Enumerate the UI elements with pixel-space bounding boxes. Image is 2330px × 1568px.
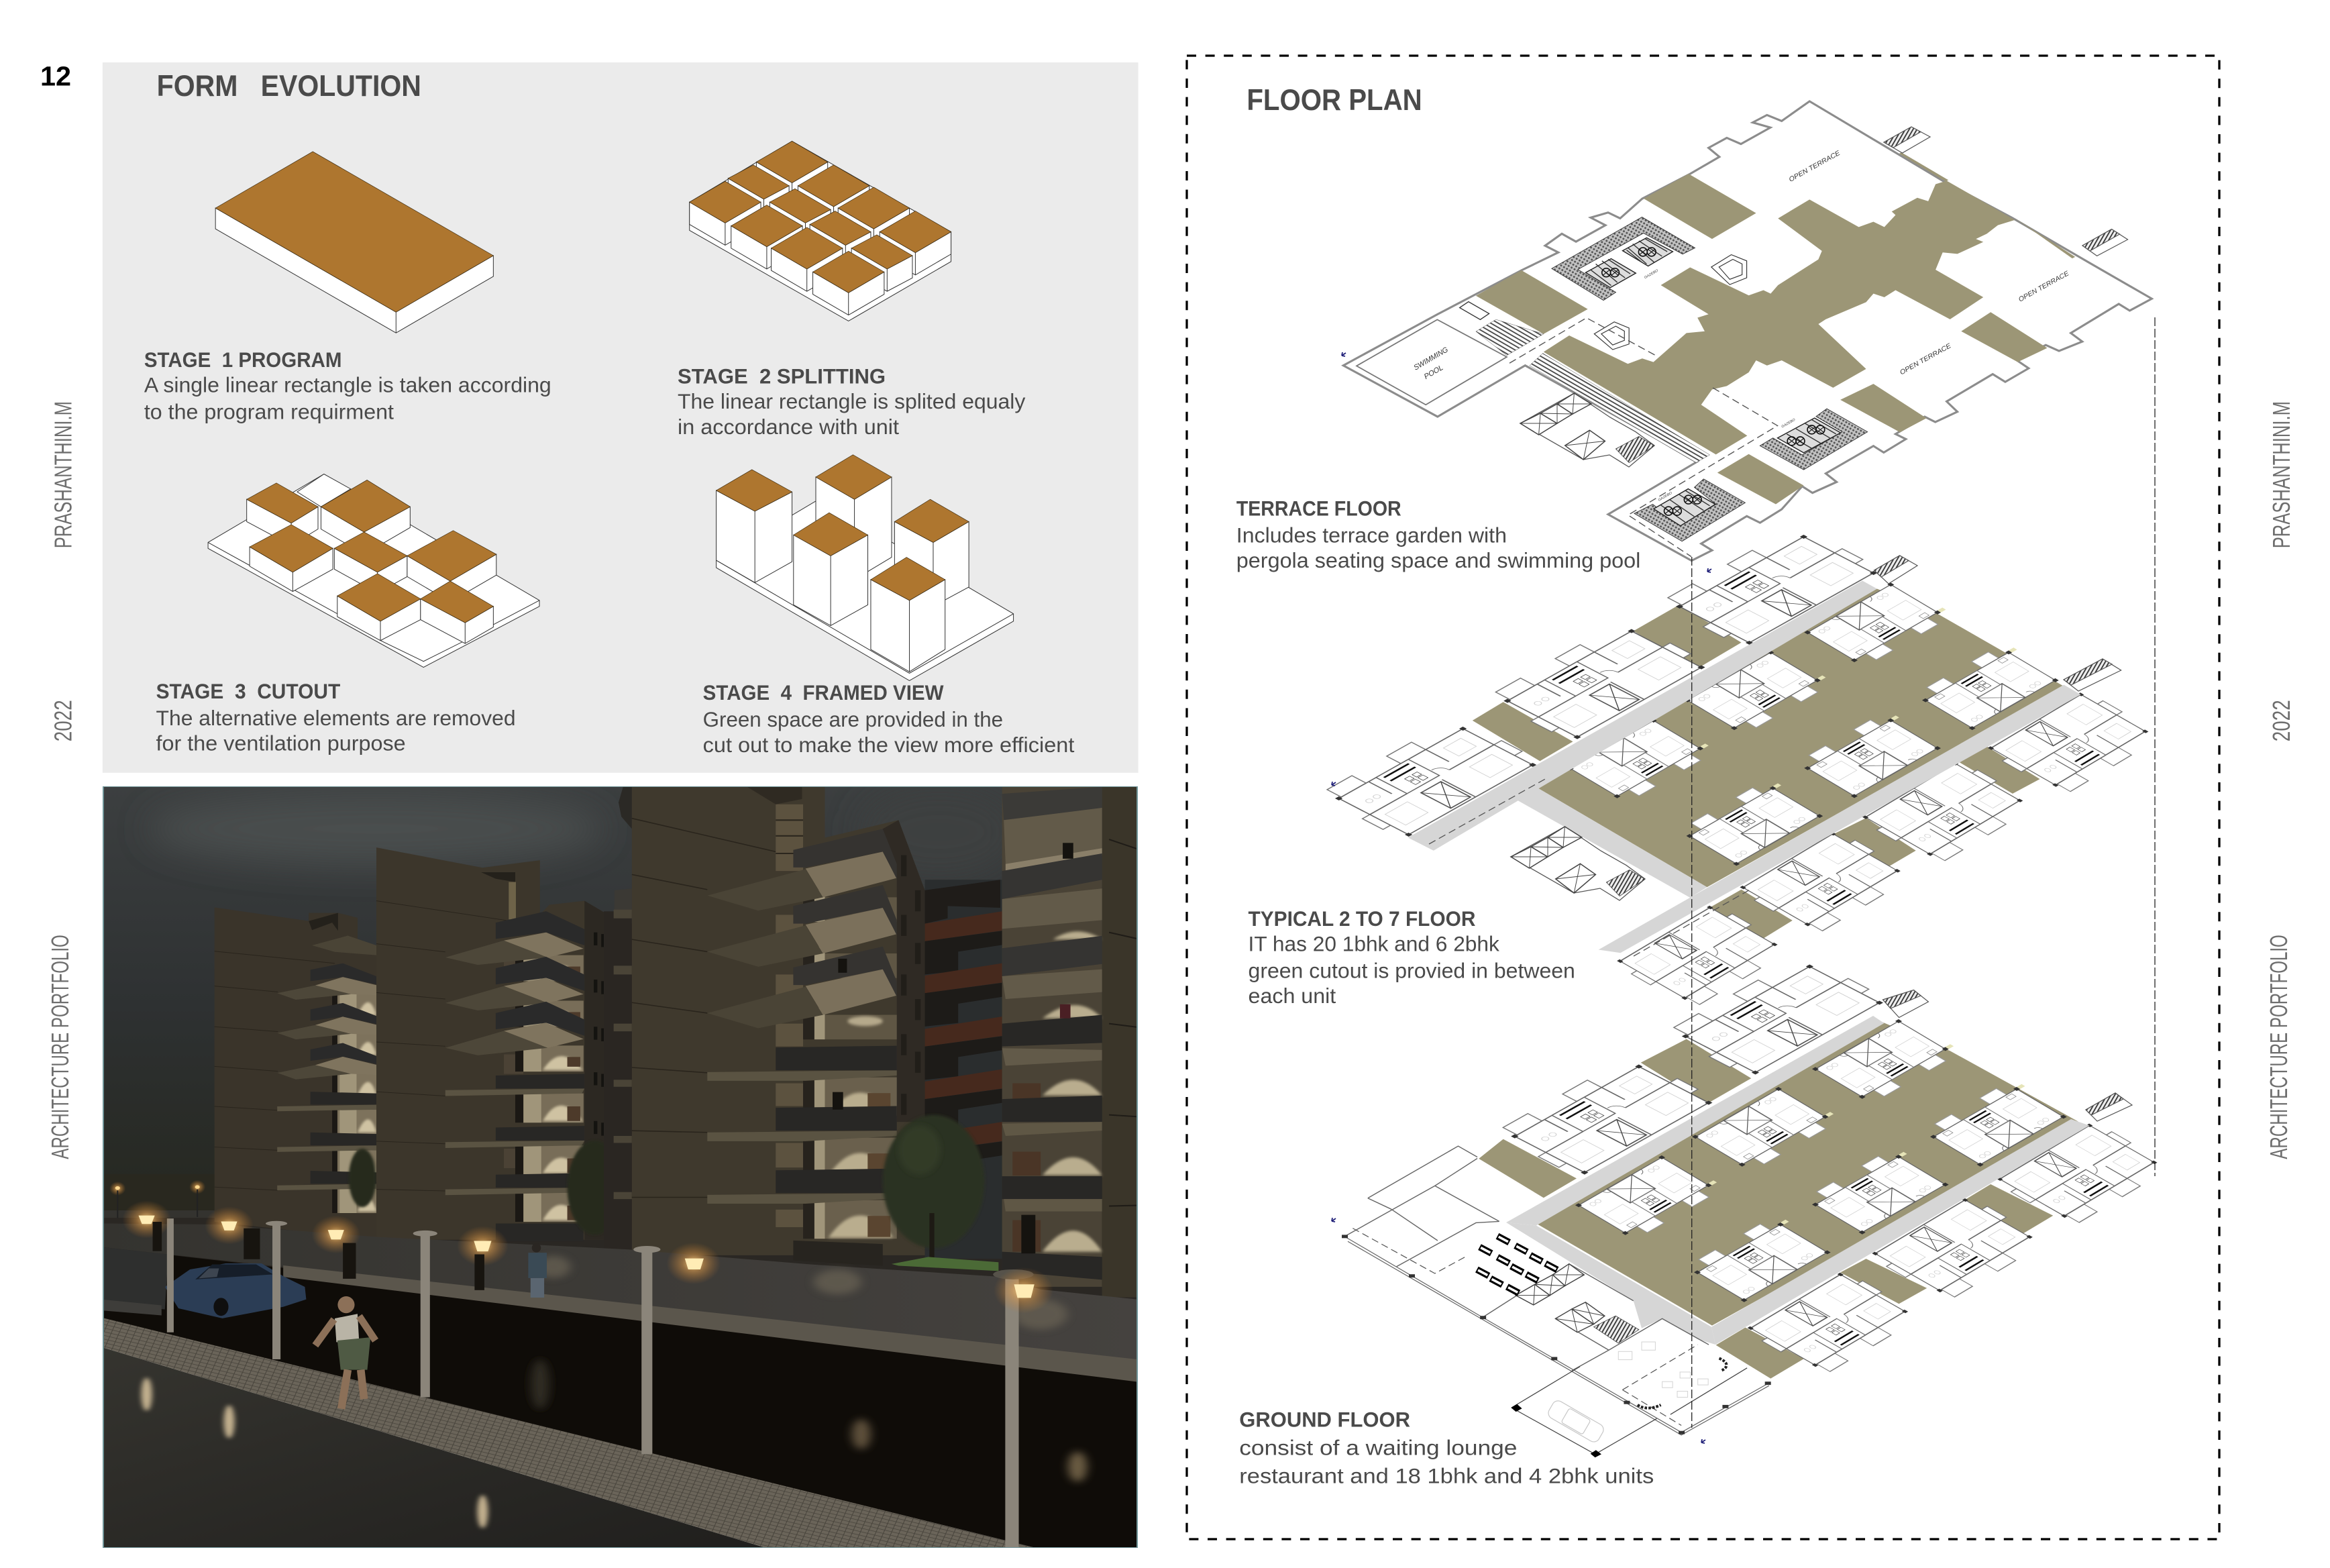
lower paver strip bbox=[101, 1317, 1041, 1549]
text: terrace floor: TERRACE FLOOR bbox=[1236, 496, 1401, 521]
plan: ground floor bbox=[1332, 955, 2172, 1457]
third terrace label: OPEN TERRACE bbox=[2017, 270, 2070, 304]
green strip bbox=[1899, 152, 1948, 181]
panel: form evolution bbox=[103, 62, 1138, 773]
side text right: ARCHITECTURE PORTFOLIO bbox=[2265, 935, 2292, 1159]
photo: night render of apartment blocks bbox=[101, 785, 1138, 1549]
terrace green roof cross bbox=[1544, 180, 2015, 454]
text: stage 4: STAGE 4 FRAMED VIEW bbox=[703, 680, 944, 704]
lamp posts bbox=[167, 1218, 1034, 1549]
tree behind building 2 bbox=[349, 1149, 376, 1207]
bottom asphalt bbox=[101, 1347, 770, 1549]
terrace open labels: GAZEBO bbox=[1644, 268, 1659, 280]
terrace service cores bbox=[1520, 393, 1654, 467]
terrace outline bbox=[1343, 101, 2152, 561]
ground plane bbox=[101, 1180, 1137, 1549]
man in vest bbox=[315, 1296, 376, 1409]
terrace open labels: OPEN TERRACE bbox=[1899, 342, 1952, 376]
balcony figures bbox=[833, 843, 1073, 1253]
car bbox=[165, 1263, 306, 1318]
page number: 12 bbox=[40, 60, 71, 91]
terrace open labels: GAZEBO bbox=[1658, 491, 1673, 503]
gazebo icons bbox=[1594, 255, 1747, 350]
text: stage 2: STAGE 2 SPLITTING bbox=[678, 364, 886, 388]
typical corridors bbox=[1408, 580, 2081, 953]
large tree bbox=[883, 1115, 998, 1271]
text: ground floor: GROUND FLOOR bbox=[1239, 1407, 1410, 1431]
text: stage 2 bbox=[678, 364, 1025, 439]
buildings 1 and 2 bbox=[215, 847, 634, 1241]
side text left bbox=[46, 401, 76, 1159]
pavement bbox=[101, 1223, 1137, 1367]
text: terrace floor: Includes terrace garden with bbox=[1236, 523, 1507, 547]
panel: floor plan dashed frame bbox=[1187, 56, 2219, 1539]
diagram: stage 4 framed view bbox=[717, 455, 1014, 680]
text: stage 3 bbox=[156, 679, 516, 755]
text: typical floor: each unit bbox=[1249, 984, 1336, 1008]
tree beside building 3 bbox=[566, 1142, 599, 1232]
walkers bbox=[153, 1222, 484, 1290]
text: stage 4 bbox=[703, 680, 1075, 757]
diagram: stage 1 block bbox=[215, 152, 493, 333]
pergola seating bbox=[1552, 217, 1868, 541]
side text left: PRASHANTHINI.M bbox=[49, 401, 76, 548]
terrace green patches bbox=[1476, 174, 2075, 504]
heading: floor plan: FLOOR PLAN bbox=[1247, 84, 1422, 117]
ground corridors bbox=[1506, 1016, 2089, 1345]
typical green courtyard bbox=[1473, 588, 2064, 939]
side text right: PRASHANTHINI.M bbox=[2268, 401, 2295, 548]
wet road bbox=[101, 1247, 1137, 1549]
water reflections bbox=[531, 1359, 1087, 1481]
ground units bbox=[1493, 955, 2172, 1376]
swimming pool: POOL bbox=[1423, 364, 1444, 381]
side text right bbox=[2265, 401, 2295, 1159]
diagram: stage 2 split blocks bbox=[690, 141, 951, 321]
core glazing bbox=[776, 804, 803, 1227]
ground green courtyard bbox=[1479, 1021, 2078, 1379]
pavement reflections bbox=[537, 1256, 1067, 1329]
text: stage 1: STAGE 1 PROGRAM bbox=[144, 348, 341, 372]
text: stage 4: cut out to make the view more efficient bbox=[703, 733, 1075, 757]
terrace stairs bbox=[1884, 127, 2128, 256]
sky bbox=[103, 785, 1138, 1318]
text: stage 2: in accordance with unit bbox=[678, 415, 899, 439]
building 3 wall bbox=[632, 785, 925, 1255]
text: stage 4: Green space are provided in the bbox=[703, 707, 1003, 731]
text: typical floor: IT has 20 1bhk and 6 2bhk bbox=[1249, 932, 1499, 956]
hatched decks bbox=[1476, 319, 1709, 463]
text: stage 1: to the program requirment bbox=[144, 400, 394, 424]
upper paver strip bbox=[283, 1265, 1137, 1381]
text: typical floor: TYPICAL 2 TO 7 FLOOR bbox=[1249, 906, 1476, 931]
text: stage 2: The linear rectangle is splited equaly bbox=[678, 389, 1025, 413]
ground stairs bbox=[1883, 990, 2132, 1121]
balconies: building 2 bbox=[445, 911, 584, 1241]
lobby seating bbox=[1638, 1359, 1726, 1408]
narrow building between bbox=[604, 910, 632, 1200]
typical units bbox=[1317, 525, 2164, 1009]
dining tables bbox=[1475, 1233, 1558, 1296]
building 2 wall bbox=[376, 847, 585, 1240]
terrace open labels: OPEN TERRACE bbox=[1788, 150, 1842, 184]
typical dash lines bbox=[1429, 778, 1751, 956]
tower bbox=[1002, 785, 1138, 1298]
ground stair core bbox=[1594, 1316, 1639, 1343]
man in blue shirt bbox=[528, 1243, 547, 1298]
pedestrians bbox=[153, 1222, 547, 1409]
text: terrace floor: pergola seating space and swimming pool bbox=[1236, 548, 1640, 572]
text: stage 3: STAGE 3 CUTOUT bbox=[156, 679, 340, 703]
far street lights bbox=[109, 1180, 205, 1218]
brown beams bbox=[925, 880, 1004, 1259]
side text left: 2022 bbox=[49, 700, 76, 741]
heading: form evolution: FORM EVOLUTION bbox=[157, 70, 421, 103]
side text left: ARCHITECTURE PORTFOLIO bbox=[46, 935, 74, 1159]
asphalt reflections bbox=[142, 1377, 488, 1528]
diagram: stage 3 cutout bbox=[208, 474, 539, 668]
terrace details bbox=[1510, 150, 1952, 557]
terrace open labels: GAZEBO bbox=[1781, 418, 1796, 429]
text: stage 3: for the ventilation purpose bbox=[156, 731, 406, 755]
balconies: building 1 bbox=[277, 963, 376, 1213]
text: stage 1 bbox=[144, 348, 551, 424]
section dash lines bbox=[1510, 318, 1778, 557]
terrace open labels bbox=[1644, 150, 1952, 503]
car outline bbox=[1546, 1399, 1605, 1444]
text: typical floor: green cutout is provied in between bbox=[1249, 958, 1575, 982]
building 1 wall bbox=[215, 907, 376, 1240]
lift shafts bbox=[1516, 1264, 1605, 1332]
text: stage 3: The alternative elements are removed bbox=[156, 706, 516, 730]
swimming pool bbox=[1357, 302, 1507, 405]
text: stage 1: A single linear rectangle is taken according bbox=[144, 373, 551, 397]
text: ground floor: consist of a waiting lounge bbox=[1239, 1435, 1517, 1459]
lobby, restaurant and porch linework bbox=[1342, 1146, 1771, 1457]
lamps bbox=[122, 1200, 1053, 1313]
plan: terrace floor bbox=[1342, 101, 2152, 561]
plan: typical 2 to 7 floor bbox=[1317, 525, 2164, 1009]
porch corner posts bbox=[1511, 1404, 1601, 1457]
round backdrop building bbox=[619, 787, 632, 829]
text: ground floor: restaurant and 18 1bhk and 4 2bhk units bbox=[1239, 1464, 1654, 1488]
vertical alignment lines bbox=[1692, 317, 2155, 1428]
column markers bbox=[1342, 1235, 1771, 1434]
text: ground floor bbox=[1239, 1407, 1654, 1488]
side text right: 2022 bbox=[2268, 700, 2295, 741]
text: terrace floor bbox=[1236, 496, 1640, 572]
balconies: building 3 bbox=[707, 829, 897, 1266]
typical service core bbox=[1511, 827, 1645, 900]
building 3 and tower bbox=[604, 785, 1138, 1298]
swimming pool: SWIMMING bbox=[1412, 346, 1450, 372]
text: typical floor bbox=[1249, 906, 1575, 1008]
typical stairs bbox=[1874, 556, 2121, 691]
